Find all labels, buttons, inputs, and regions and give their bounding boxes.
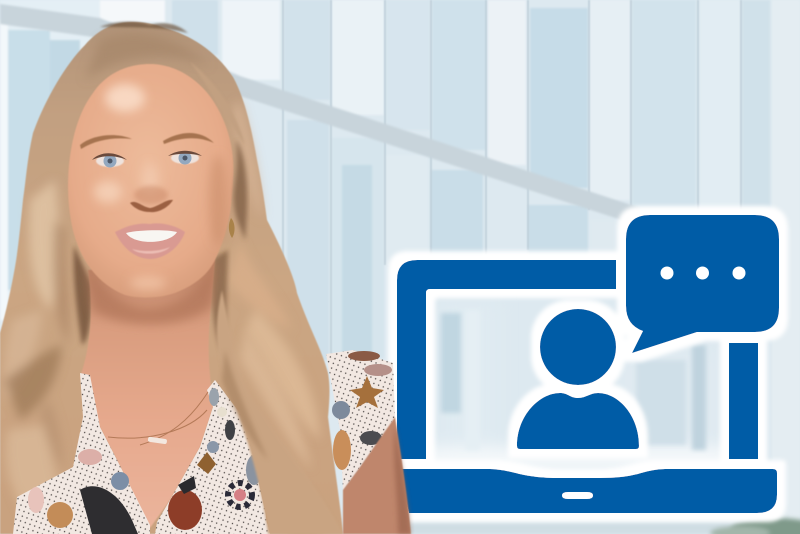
blouse: shoulder sleeve <box>326 350 395 490</box>
icon: person head <box>540 309 616 385</box>
dark hair under jaw left <box>74 245 92 345</box>
brows <box>80 133 214 149</box>
neck and chest <box>80 260 215 528</box>
mouth <box>115 223 185 259</box>
blouse: floral prints <box>28 351 392 534</box>
hair over right temple <box>190 62 245 145</box>
beam <box>0 4 640 226</box>
dark hair under jaw right <box>212 250 228 352</box>
frosted screen area inside laptop <box>420 300 750 468</box>
icon: laptop base <box>399 469 777 513</box>
upper arm <box>343 417 411 534</box>
icon: person shoulders <box>517 393 639 449</box>
eyes <box>92 151 202 168</box>
blouse: right collar <box>155 380 270 534</box>
hair shading <box>3 33 325 534</box>
necklace <box>108 392 208 445</box>
icon: speech bubble <box>626 215 779 353</box>
earring <box>229 218 235 238</box>
front hair strands <box>217 290 343 534</box>
hair back <box>0 22 343 534</box>
nose <box>130 186 173 212</box>
icon: laptop with video-call person and speech bubble <box>397 215 779 513</box>
face highlights <box>94 84 227 290</box>
blouse: left panel <box>13 373 150 534</box>
bottom foliage <box>410 518 800 534</box>
dark hair behind ear <box>234 140 247 240</box>
icon: laptop screen frame <box>397 260 616 459</box>
icon: speech bubble dots <box>660 266 746 280</box>
blouse <box>13 350 395 534</box>
presenter: woman with long blonde hair <box>0 22 411 534</box>
icon: laptop screen right edge <box>729 343 758 459</box>
window mullions <box>282 0 742 360</box>
face <box>68 64 233 297</box>
